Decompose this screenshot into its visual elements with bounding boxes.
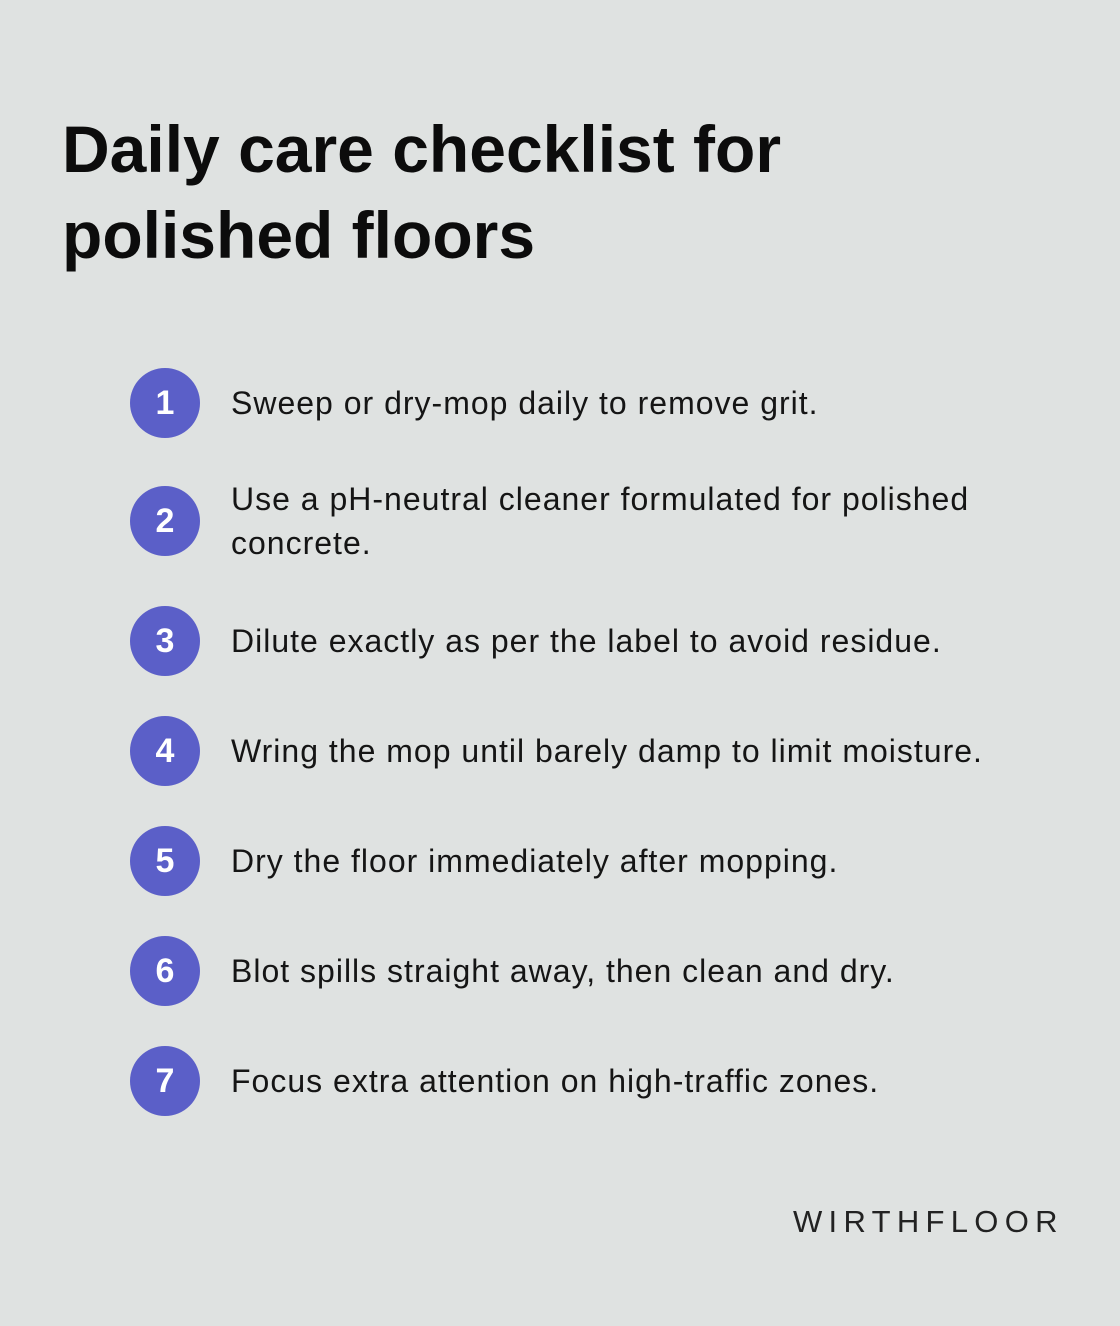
item 7: [130, 1046, 879, 1116]
item 5: 5: [156, 842, 174, 880]
item 7: 7: [156, 1062, 174, 1100]
item 3: 3: [156, 622, 174, 660]
item 5: Dry the floor immediately after mopping.: [231, 843, 838, 879]
brand logo: WIRTHFLOOR: [793, 1204, 1064, 1239]
item 1: 1: [156, 384, 174, 422]
item 4: Wring the mop until barely damp to limit moisture.: [231, 733, 983, 769]
item 3: [130, 606, 942, 676]
item 3: Dilute exactly as per the label to avoid residue.: [231, 623, 942, 659]
item 6: Blot spills straight away, then clean and dry.: [231, 953, 895, 989]
item 4: 4: [156, 732, 174, 770]
title: [62, 112, 781, 272]
item 2: 2: [156, 502, 174, 540]
checklist: [130, 368, 983, 1116]
item 1: [130, 368, 819, 438]
item 5: [130, 826, 838, 896]
item 6: 6: [156, 952, 174, 990]
title: polished floors: [62, 198, 535, 272]
title: Daily care checklist for: [62, 112, 781, 186]
item 2: Use a pH-neutral cleaner formulated for polished concrete.: [231, 481, 969, 561]
item 6: [130, 936, 895, 1006]
item 1: Sweep or dry-mop daily to remove grit.: [231, 385, 819, 421]
item 4: [130, 716, 983, 786]
item 7: Focus extra attention on high-traffic zones.: [231, 1063, 879, 1099]
